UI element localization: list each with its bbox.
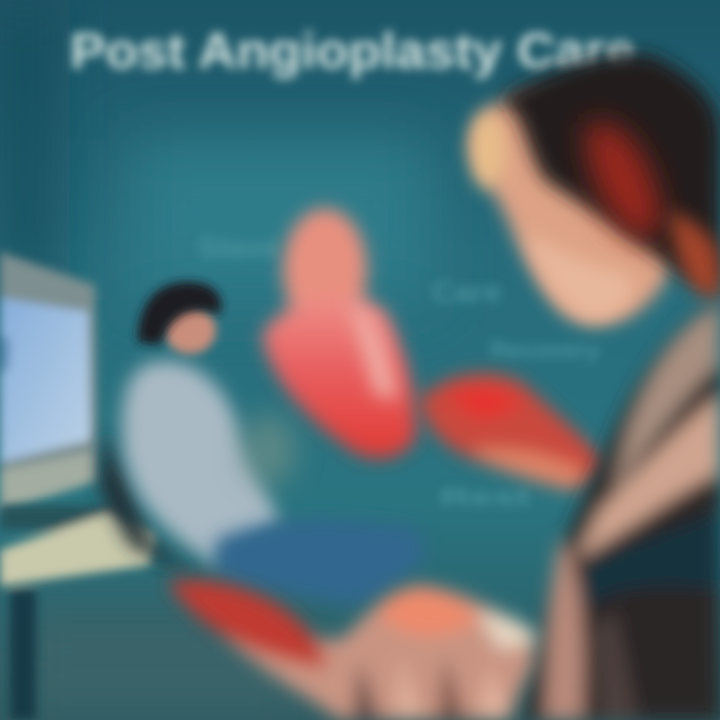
computer monitor — [0, 252, 98, 512]
large foreground head — [470, 54, 720, 324]
chair — [240, 414, 296, 486]
patient head — [164, 306, 216, 354]
patient legs — [215, 520, 425, 605]
hair — [505, 54, 720, 285]
red hand — [418, 373, 605, 490]
title: Post Angioplasty Care — [70, 23, 635, 79]
patient shadow side — [100, 430, 200, 580]
floating labels: Stent — [198, 232, 278, 265]
floating labels: Care — [432, 276, 502, 309]
face — [470, 94, 672, 324]
eye highlight — [472, 112, 504, 188]
red cheek — [585, 122, 661, 239]
heart — [262, 208, 416, 458]
floating labels — [198, 232, 601, 511]
jaw — [525, 230, 633, 322]
floating labels: Rest — [440, 484, 530, 511]
floating labels: Recovery — [490, 337, 601, 364]
desk — [0, 505, 155, 720]
seated patient — [100, 282, 425, 605]
foreground arm and torso — [525, 300, 720, 720]
foreground bottom hand — [168, 580, 540, 720]
patient body — [122, 361, 280, 565]
